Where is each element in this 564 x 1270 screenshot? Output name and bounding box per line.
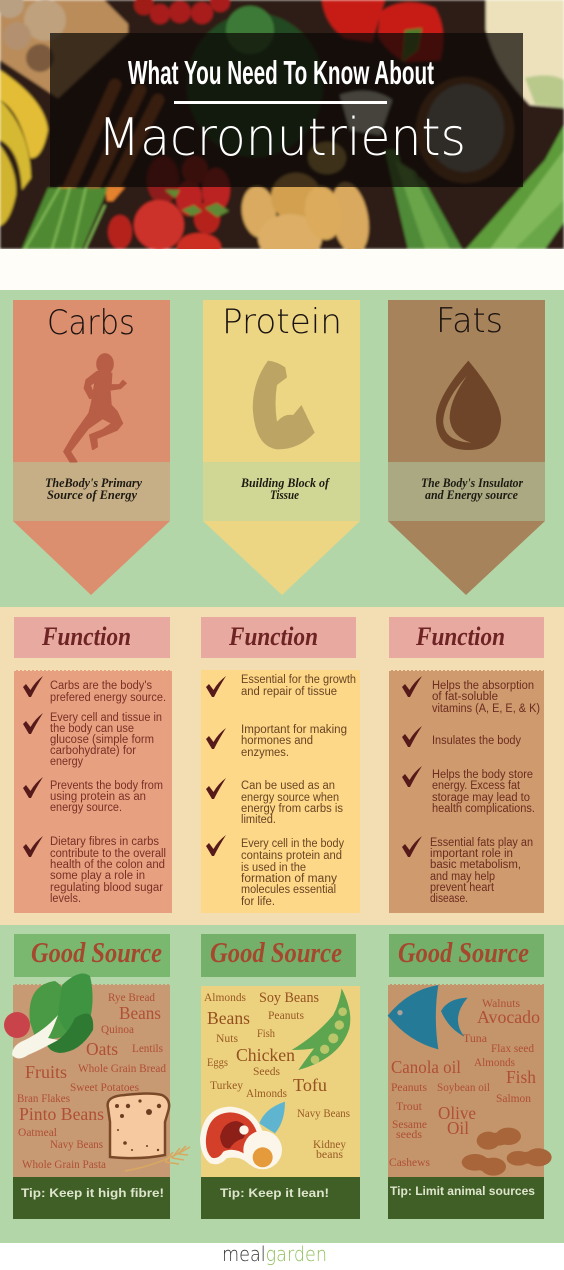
function list: protein: enzymes. bbox=[241, 747, 289, 759]
panel: carbs function bbox=[14, 617, 172, 913]
food word cloud: protein: Almonds bbox=[204, 992, 247, 1004]
tagline: protein bbox=[240, 475, 331, 502]
food word cloud: protein: Tofu bbox=[293, 1075, 327, 1095]
tip: carbs: Tip: Keep it high fibre! bbox=[21, 1186, 164, 1200]
function list: carbs: regulating blood sugar bbox=[50, 882, 163, 894]
food word cloud: fats: Tuna bbox=[463, 1033, 487, 1045]
tip: carbs bbox=[13, 1177, 170, 1219]
food word cloud: protein: Soy Beans bbox=[259, 990, 319, 1006]
food word cloud: fats: Flax seed bbox=[491, 1043, 534, 1055]
food word cloud: fats: Cashews bbox=[389, 1157, 431, 1169]
function list: protein: contains protein and bbox=[241, 850, 342, 862]
heading: good source: Good Source bbox=[210, 937, 342, 969]
function list: carbs: Carbs are the body's bbox=[50, 680, 152, 692]
heading: good source: Good Source bbox=[31, 937, 162, 969]
food word cloud: protein: Beans bbox=[207, 1008, 250, 1028]
logo: mealgarden: mealgarden bbox=[222, 1242, 327, 1266]
function list: carbs: levels. bbox=[50, 893, 81, 905]
function list: protein: molecules essential bbox=[241, 884, 336, 896]
tagline: protein: Tissue bbox=[270, 487, 299, 502]
function list: protein bbox=[241, 674, 356, 908]
function list: protein: is used in the bbox=[241, 862, 306, 874]
tagline: carbs: TheBody's Primary bbox=[45, 475, 142, 490]
title: macronutrients: Macronutrients bbox=[98, 108, 466, 168]
function list: fats: prevent heart bbox=[430, 882, 495, 894]
function list: carbs bbox=[50, 680, 166, 905]
function list: protein: Can be used as an bbox=[241, 780, 335, 792]
function list: protein: for life. bbox=[241, 896, 275, 908]
icon: peanuts bbox=[462, 1128, 552, 1176]
function list: carbs: Every cell and tissue in bbox=[50, 712, 162, 724]
function list: protein: hormones and bbox=[241, 735, 313, 747]
tip: fats: Tip: Limit animal sources bbox=[390, 1184, 535, 1198]
panel: protein sources bbox=[200, 934, 360, 1219]
food word cloud: carbs: Lentils bbox=[132, 1043, 163, 1055]
function list: fats: Helps the absorption bbox=[432, 680, 534, 692]
tagline: fats bbox=[421, 475, 524, 502]
function list: fats: Helps the body store bbox=[432, 769, 533, 781]
heading: protein: Protein bbox=[222, 302, 342, 342]
tip: protein: Tip: Keep it lean! bbox=[220, 1186, 329, 1200]
function list: fats: and may help bbox=[430, 871, 495, 883]
food word cloud: carbs: Navy Beans bbox=[50, 1139, 103, 1151]
icon: flexed arm bbox=[253, 361, 315, 449]
function list: fats: Insulates the body bbox=[432, 735, 521, 747]
food word cloud: fats: Salmon bbox=[496, 1093, 531, 1105]
function list: fats: storage may lead to bbox=[432, 792, 530, 804]
food word cloud: protein: Peanuts bbox=[268, 1010, 305, 1022]
food word cloud: fats: Walnuts bbox=[482, 998, 521, 1010]
function list: protein: energy source when bbox=[241, 792, 339, 804]
function list: fats: health complications. bbox=[432, 803, 535, 815]
food word cloud: carbs: Rye Bread bbox=[108, 992, 155, 1004]
icon: oil drop bbox=[436, 361, 501, 450]
function list: fats: of fat-soluble bbox=[432, 691, 498, 703]
function list: fats: Essential fats play an bbox=[430, 837, 533, 849]
food word cloud: protein: beans bbox=[316, 1149, 344, 1161]
icon: greens and apple bbox=[4, 973, 93, 1058]
title overlay panel bbox=[50, 33, 523, 187]
food word cloud: carbs: Sweet Potatoes bbox=[70, 1082, 140, 1094]
food word cloud: fats: Soybean oil bbox=[437, 1082, 490, 1094]
function list: carbs: using protein as an bbox=[50, 791, 146, 803]
food word cloud: carbs: Quinoa bbox=[101, 1024, 134, 1036]
food word cloud: carbs: Oatmeal bbox=[18, 1127, 57, 1139]
function list: carbs: contribute to the overall bbox=[50, 848, 166, 860]
panel: protein banner bbox=[203, 300, 360, 595]
function list: carbs: prefered energy source. bbox=[50, 692, 166, 704]
tagline: carbs: Source of Energy bbox=[47, 487, 137, 502]
tagline: fats: The Body's Insulator bbox=[421, 475, 524, 490]
food word cloud: protein: Kidney bbox=[313, 1139, 346, 1151]
panel: protein function bbox=[201, 617, 360, 913]
tagline: fats: and Energy source bbox=[425, 487, 518, 502]
icon: runner bbox=[64, 354, 126, 462]
icon: fish bbox=[388, 985, 468, 1049]
icon: meat, egg and fish bbox=[200, 1102, 285, 1169]
function list: protein: Important for making bbox=[241, 724, 347, 736]
header photo: vegetables on dark wood bbox=[0, 0, 564, 262]
food word cloud: fats: Olive bbox=[438, 1103, 476, 1123]
function list: fats: vitamins (A, E, E, & K) bbox=[432, 703, 540, 715]
checkmarks bbox=[402, 676, 422, 857]
food word cloud: carbs: Bran Flakes bbox=[17, 1093, 70, 1105]
function list: protein: Every cell in the body bbox=[241, 838, 344, 850]
checkmarks bbox=[206, 676, 226, 856]
function list: fats bbox=[430, 680, 540, 905]
function list: fats: important role in bbox=[430, 848, 513, 860]
function list: carbs: Prevents the body from bbox=[50, 780, 163, 792]
food word cloud: protein: Eggs bbox=[207, 1057, 228, 1069]
food word cloud: protein: Nuts bbox=[216, 1033, 239, 1045]
food word cloud: fats: Sesame bbox=[392, 1119, 427, 1131]
food word cloud: protein: Turkey bbox=[210, 1080, 243, 1092]
food word cloud: carbs: Fruits bbox=[25, 1062, 67, 1082]
function list: carbs: some play a role in bbox=[50, 870, 145, 882]
function list: protein: formation of many bbox=[241, 873, 337, 885]
panel: carbs banner bbox=[13, 300, 170, 595]
food word cloud: carbs: Whole Grain Bread bbox=[78, 1063, 166, 1075]
food word cloud: protein: Navy Beans bbox=[297, 1108, 350, 1120]
panel: fats sources bbox=[388, 934, 552, 1219]
heading: carbs: Carbs bbox=[47, 303, 135, 343]
food word cloud: protein: Fish bbox=[257, 1028, 275, 1040]
function list: protein: limited. bbox=[241, 814, 276, 826]
food word cloud: fats: Trout bbox=[396, 1101, 423, 1113]
function list: carbs: Dietary fibres in carbs bbox=[50, 836, 159, 848]
function list: fats: energy. Excess fat bbox=[432, 780, 521, 792]
icon: wheat bbox=[125, 1146, 190, 1171]
food word cloud: protein: Almonds bbox=[246, 1088, 288, 1100]
food word cloud: carbs bbox=[17, 992, 166, 1171]
food word cloud: protein: Chicken bbox=[236, 1045, 295, 1065]
food word cloud: protein: Seeds bbox=[253, 1066, 281, 1078]
tip: protein bbox=[201, 1177, 360, 1219]
function list: carbs: energy bbox=[50, 756, 83, 768]
heading: good source: Good Source bbox=[398, 937, 529, 969]
function list: carbs: carbohydrate) for bbox=[50, 745, 136, 757]
heading: function: Function bbox=[228, 622, 318, 651]
food word cloud: fats: Almonds bbox=[474, 1057, 516, 1069]
function list: fats: disease. bbox=[430, 893, 468, 905]
panel: carbs sources bbox=[4, 934, 190, 1219]
food word cloud: fats: Peanuts bbox=[391, 1082, 428, 1094]
food word cloud: fats: Canola oil bbox=[391, 1057, 461, 1077]
function list: carbs: glucose (simple form bbox=[50, 734, 154, 746]
tip: fats bbox=[388, 1177, 544, 1219]
food word cloud: protein bbox=[204, 990, 350, 1161]
panel: fats function bbox=[389, 617, 544, 913]
function list: protein: energy from carbs is bbox=[241, 803, 343, 815]
food word cloud: fats: Fish bbox=[506, 1067, 536, 1087]
food word cloud: fats: Oil bbox=[447, 1118, 469, 1138]
food word cloud: fats: Avocado bbox=[477, 1007, 540, 1027]
function list: fats: basic metabolism, bbox=[430, 859, 521, 871]
function list: protein: Essential for the growth bbox=[241, 674, 356, 686]
function list: protein: and repair of tissue bbox=[241, 686, 337, 698]
heading: function: Function bbox=[41, 622, 131, 651]
food word cloud: carbs: Whole Grain Pasta bbox=[22, 1159, 106, 1171]
icon: pea pod bbox=[292, 988, 350, 1070]
function list: carbs: energy source. bbox=[50, 802, 122, 814]
food word cloud: carbs: Oats bbox=[86, 1039, 118, 1059]
food word cloud: fats: seeds bbox=[396, 1129, 423, 1141]
panel: fats banner bbox=[388, 300, 545, 595]
icon: bread slice bbox=[108, 1094, 169, 1158]
function list: carbs: health of the colon and bbox=[50, 859, 165, 871]
food word cloud: fats bbox=[389, 998, 540, 1169]
function list: carbs: the body can use bbox=[50, 723, 134, 735]
checkmarks bbox=[23, 676, 43, 857]
tagline: protein: Building Block of bbox=[240, 475, 331, 490]
food word cloud: carbs: Beans bbox=[119, 1003, 161, 1023]
heading: function: Function bbox=[415, 622, 505, 651]
tagline: carbs bbox=[45, 475, 142, 502]
heading: fats: Fats bbox=[436, 301, 503, 341]
food word cloud: carbs: Pinto Beans bbox=[19, 1104, 104, 1124]
